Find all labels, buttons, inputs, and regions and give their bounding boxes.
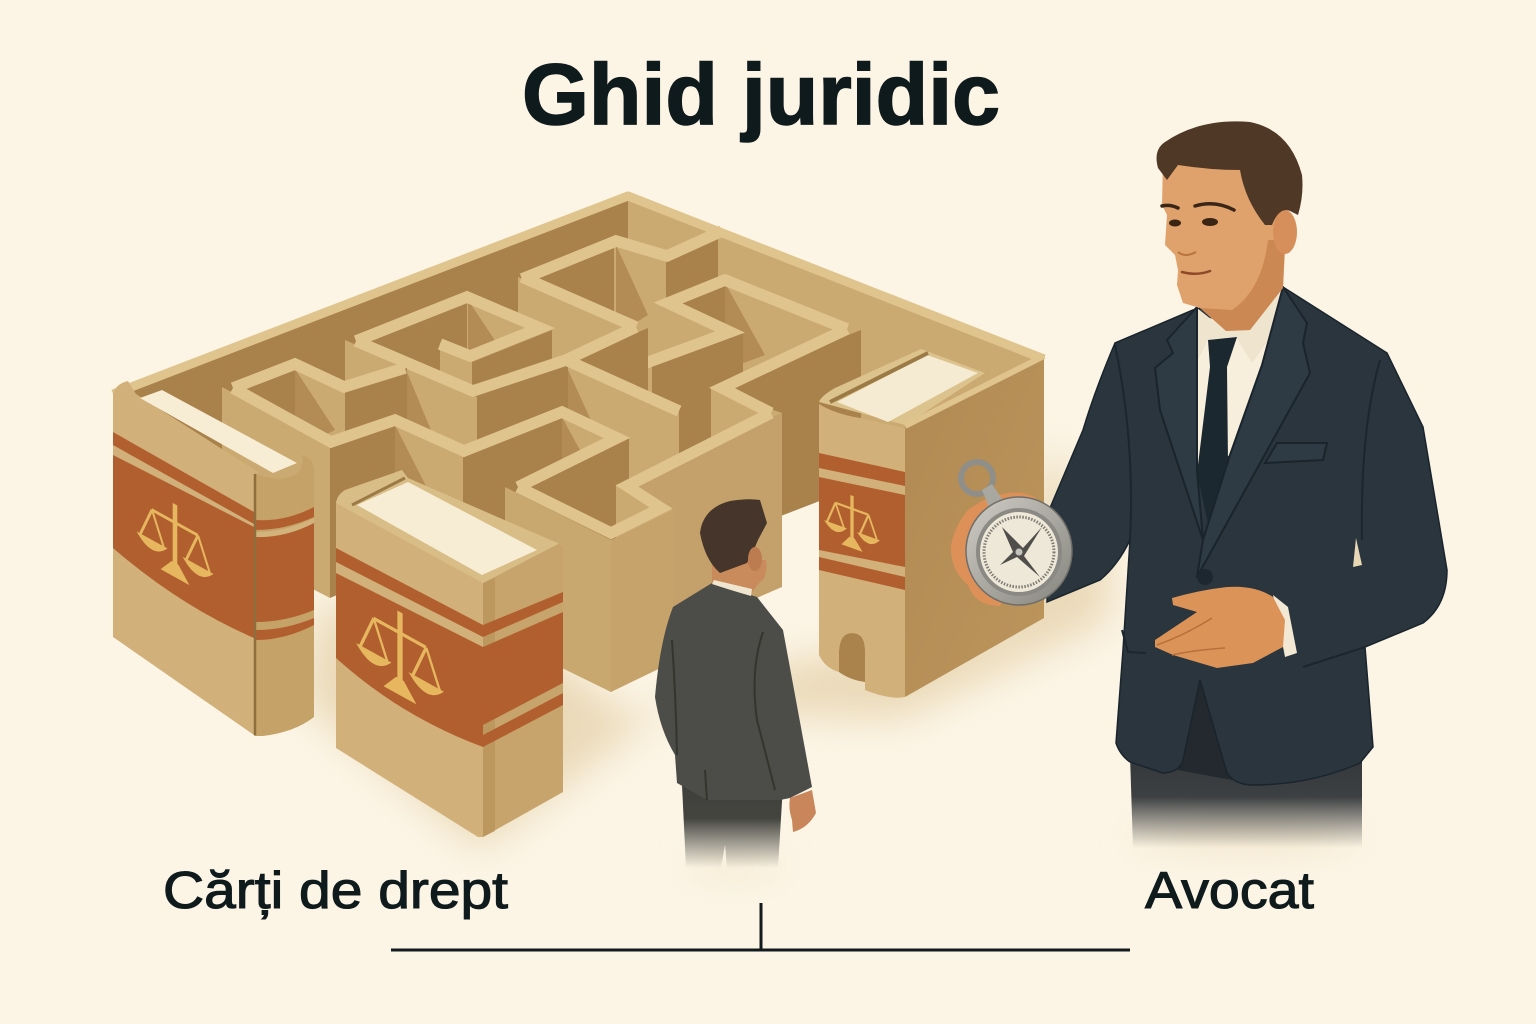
lawyer jacket seams and arm gap	[1115, 345, 1380, 667]
compass stem	[982, 484, 1004, 510]
compass in hand	[951, 462, 1072, 606]
ground shadows	[300, 440, 1360, 871]
lawyer legs	[1130, 670, 1362, 848]
compass ring	[961, 462, 993, 494]
book 2 bands	[336, 548, 563, 747]
lawyer lapels	[1155, 287, 1310, 577]
book 2 hinge	[483, 578, 495, 837]
book 1 hinge	[254, 474, 256, 735]
book 3 top plate	[819, 349, 985, 425]
lawyer tie	[1197, 337, 1237, 523]
label: lawyer: Avocat	[1145, 862, 1315, 920]
compass face	[980, 512, 1058, 592]
lawyer right hand	[1155, 587, 1285, 668]
small man legs	[682, 785, 783, 868]
compass case	[966, 497, 1072, 605]
book 3 side cover	[905, 355, 1044, 697]
book 1 spine	[113, 381, 258, 735]
book 3 pages	[837, 355, 978, 422]
lawyer button	[1197, 569, 1213, 585]
label: law books: Cărți de drept	[163, 862, 509, 920]
lawyer hair	[1157, 121, 1302, 225]
icon: scales of justice	[826, 486, 878, 556]
bracket connector	[391, 903, 1130, 950]
book 2	[336, 470, 563, 837]
maze inner wall: back section	[518, 231, 722, 483]
lawyer collar	[1197, 287, 1283, 363]
small man neck and skin	[712, 560, 766, 592]
lawyer pocket	[1265, 443, 1327, 463]
book 1 bands	[113, 432, 314, 640]
lawyer jacket	[1047, 287, 1447, 785]
book 3 bands	[819, 453, 905, 590]
small man jacket	[655, 583, 812, 800]
lawyer facial features	[1162, 204, 1234, 274]
small man hair	[700, 499, 767, 573]
lawyer	[1047, 121, 1447, 848]
book 3 spine	[819, 404, 905, 698]
hand holding compass	[951, 493, 1040, 606]
maze inner wall: spiral	[345, 292, 552, 517]
lawyer neck and face	[1162, 155, 1285, 331]
book 2 pages	[357, 482, 537, 575]
small man collar	[712, 580, 752, 596]
book 2 top plate	[336, 470, 562, 590]
maze inner wall: left section	[222, 358, 629, 642]
compass needle	[1000, 527, 1042, 577]
maze inner wall: upper right section	[645, 275, 861, 518]
book 1 pages	[140, 390, 297, 473]
title: Ghid juridic	[522, 47, 1000, 143]
lawyer shirt	[1193, 288, 1283, 472]
book 3	[819, 349, 1044, 698]
book 1 side cover	[254, 455, 314, 736]
book 3 arch	[839, 633, 865, 682]
book 2 spine	[336, 503, 483, 837]
lawyer ear	[1273, 210, 1297, 254]
maze front walls	[505, 413, 782, 692]
small man seen from behind	[655, 499, 816, 868]
icon: scales of justice	[139, 484, 211, 596]
book 1	[113, 381, 314, 736]
maze outer back walls	[113, 192, 1044, 545]
book 2 side cover	[483, 543, 563, 837]
maze inner wall: central section	[345, 327, 861, 568]
lawyer cuff	[1273, 595, 1297, 657]
small man hand	[789, 790, 816, 832]
maze	[113, 192, 1044, 692]
icon: scales of justice	[359, 589, 441, 717]
